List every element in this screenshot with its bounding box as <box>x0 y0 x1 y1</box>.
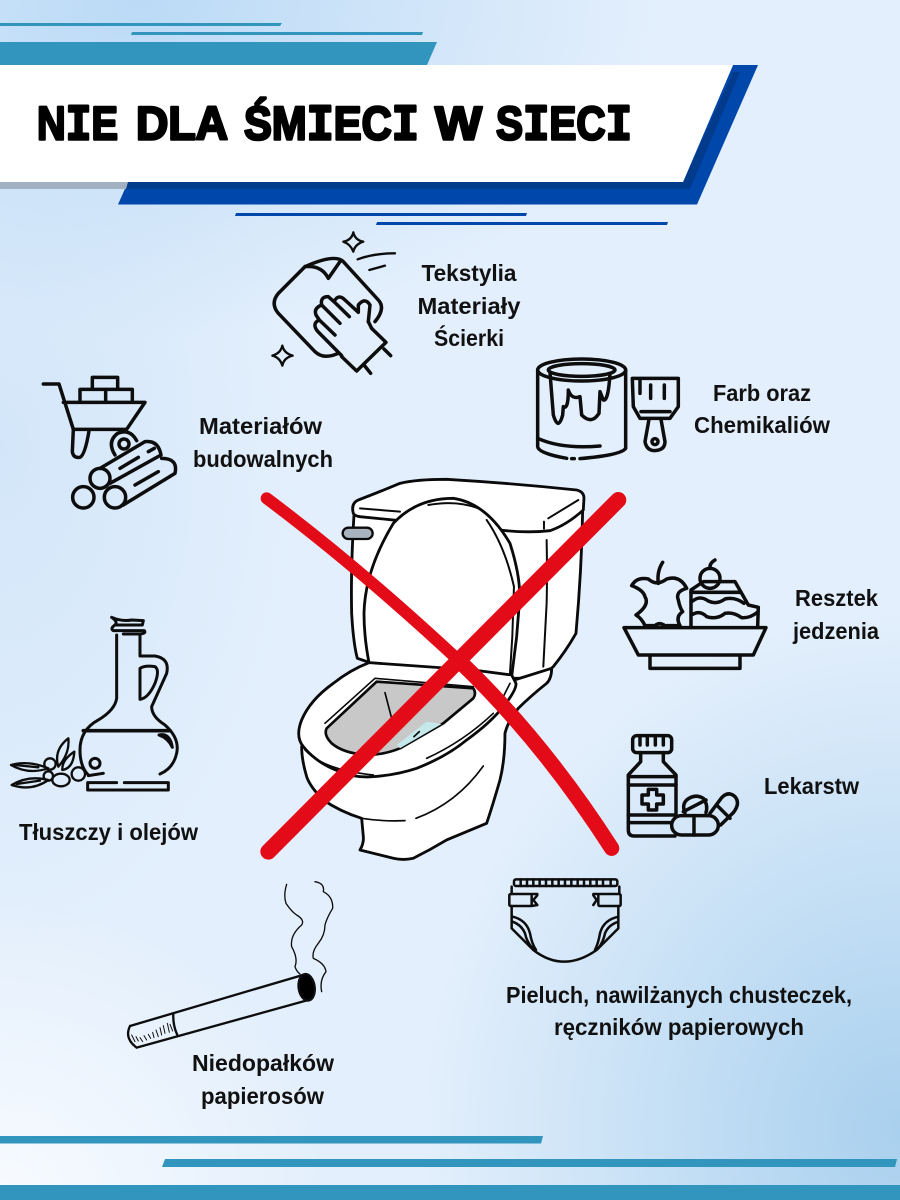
toilet illustration <box>299 479 584 859</box>
label: fats and oils: Tłuszczy i olejów <box>19 819 198 845</box>
icon: medicine bottle and pills <box>628 736 737 836</box>
title: SIECI <box>496 96 632 156</box>
label: paints and chemicals: Farb oraz <box>713 380 811 406</box>
label: building materials: Materiałów <box>199 413 322 439</box>
label: medicines: Lekarstw <box>764 773 859 799</box>
icon: diaper <box>509 879 621 962</box>
label: paints and chemicals: Chemikaliów <box>694 412 830 438</box>
label: food leftovers: Resztek <box>795 585 878 611</box>
label: diapers and wipes: Pieluch, nawilżanych chusteczek, <box>506 982 852 1008</box>
icon: wheelbarrow with bricks and logs <box>43 377 176 508</box>
label: textiles: Tekstylia <box>422 260 517 286</box>
icon: oil jug with olives <box>11 617 177 790</box>
label: building materials <box>193 413 333 472</box>
label: cigarette butts: papierosów <box>201 1083 324 1109</box>
red X <box>267 498 618 852</box>
title: W <box>435 96 483 150</box>
label: cigarette butts: Niedopałków <box>192 1050 334 1076</box>
top decorative stripes <box>0 23 437 65</box>
title <box>37 96 632 156</box>
title banner <box>0 65 758 204</box>
title: DLA <box>136 96 228 150</box>
label: textiles: Materiały <box>418 293 521 319</box>
blue stripes under title <box>235 213 668 225</box>
title: ŚMIECI <box>244 96 419 156</box>
label: diapers and wipes: ręczników papierowych <box>554 1014 804 1040</box>
icon: food leftovers on a plate <box>624 560 766 668</box>
label: textiles: Ścierki <box>434 324 504 351</box>
label: cigarette butts <box>192 1050 334 1109</box>
icon: cigarette with smoke <box>128 882 333 1048</box>
label: food leftovers: jedzenia <box>792 618 879 644</box>
icon: cleaning cloth and gloved hand <box>272 232 395 373</box>
label: food leftovers <box>792 585 879 644</box>
label: paints and chemicals <box>694 380 830 438</box>
title: NIE <box>37 96 118 156</box>
label: building materials: budowalnych <box>193 446 333 472</box>
bottom decorative stripes <box>0 1136 900 1200</box>
label: textiles <box>418 260 521 351</box>
label: diapers and wipes <box>506 982 852 1040</box>
icon: paint can and brush <box>538 359 678 459</box>
